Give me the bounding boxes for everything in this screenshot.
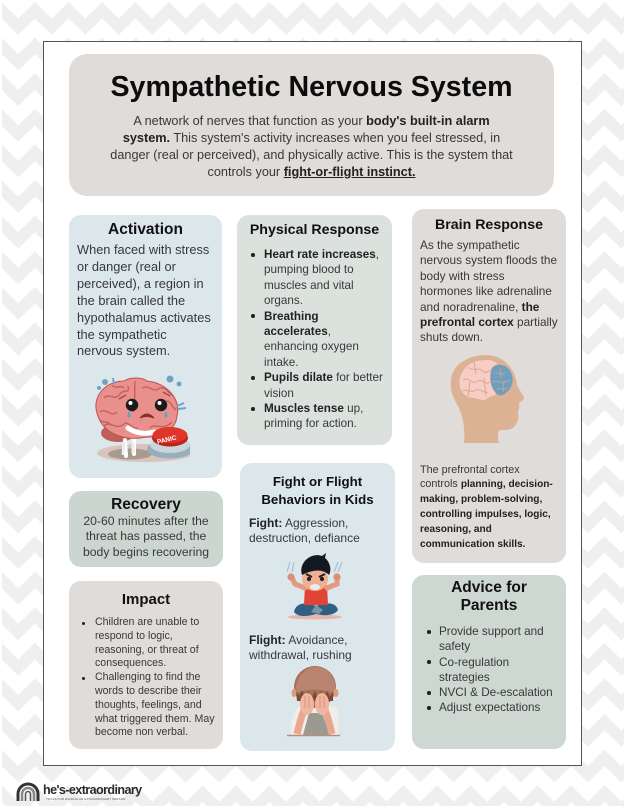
impact bullets: Challenging to find the (95, 671, 200, 683)
heading: fight or flight (261, 474, 374, 506)
title: Sympathetic Nervous System (110, 71, 513, 103)
prefrontal cortex text (420, 464, 553, 550)
icon: rainbow (16, 782, 40, 801)
intro text: system. This system's activity increases when you feel stressed, in (123, 131, 500, 145)
recovery text: threat has passed, the (86, 529, 206, 543)
physical response bullets: Pupils dilate for better (264, 371, 383, 384)
flight text (249, 633, 352, 662)
recovery text: body begins recovering (83, 545, 209, 559)
activation text: or danger (real or (77, 259, 176, 274)
prefrontal cortex text: communication skills. (420, 539, 525, 550)
impact bullets: thoughts, feelings, and (95, 699, 202, 711)
advice bullets: Provide support and (439, 625, 544, 638)
physical response bullets: muscles and vital (264, 279, 354, 292)
impact bullets: what triggered them. May (95, 713, 215, 725)
physical response bullets: organs. (264, 294, 303, 307)
logo tagline: TOOLS FOR RAISING AN EXTRAORDINARY PERSON (46, 797, 125, 801)
activation text: When faced with stress (77, 242, 209, 257)
heading: impact: Impact (122, 591, 170, 608)
activation text: the sympathetic (77, 327, 167, 342)
heading: brain response: Brain Response (435, 217, 543, 233)
panel: physical response (237, 215, 392, 445)
heading: fight or flight: Fight or Flight (273, 474, 362, 489)
flight text: Flight: Avoidance, (249, 633, 347, 647)
panel: fight or flight behaviors (240, 463, 395, 751)
prefrontal cortex text: making, problem-solving, (420, 494, 542, 505)
impact bullets: become non verbal. (95, 726, 188, 738)
physical response bullets: priming for action. (264, 417, 357, 430)
physical response bullets: vision (264, 387, 294, 400)
brain response text: body with stress (420, 269, 505, 283)
physical response bullets: Breathing (264, 310, 319, 323)
impact bullets: words to describe their (95, 685, 202, 697)
advice bullets: Adjust expectations (439, 701, 540, 714)
fight text: destruction, defiance (249, 531, 360, 545)
activation text (77, 242, 211, 358)
advice bullets: safety (439, 640, 470, 653)
advice bullets: strategies (439, 671, 490, 684)
icon: child hiding face (287, 666, 340, 736)
heading: advice for parents: Parents (461, 597, 517, 614)
physical response bullets: pumping blood to (264, 263, 354, 276)
icon: panicking brain pressing button (95, 376, 190, 462)
logo wordmark: he's-extraordinary (43, 783, 142, 797)
intro text: danger (real or perceived), and physically active. This is the system that (110, 148, 513, 162)
activation text: the brain called the (77, 293, 185, 308)
activation text: nervous system. (77, 343, 170, 358)
icon: head silhouette with brain (450, 355, 524, 443)
brain response text: hormones like adrenaline (420, 284, 552, 298)
advice bullets: NVCI & De-escalation (439, 686, 553, 699)
icon: panicking brain pressing button: PANIC (156, 434, 178, 446)
brain response text: prefrontal cortex partially (420, 315, 558, 329)
prefrontal cortex text: The prefrontal cortex (420, 464, 520, 476)
panel: brain response (412, 209, 566, 563)
panel: recovery (69, 491, 223, 567)
recovery text: 20-60 minutes after the (83, 514, 209, 528)
physical response bullets: Heart rate increases, (264, 248, 379, 261)
heading: advice for parents (451, 579, 527, 614)
fight text (249, 516, 360, 545)
physical response bullets: Muscles tense up, (264, 402, 363, 415)
intro text: controls your fight-or-flight instinct. (208, 165, 415, 179)
physical response bullets: accelerates, (264, 325, 331, 338)
panel: activation (69, 215, 222, 478)
physical response bullets (251, 248, 383, 430)
prefrontal cortex text: controls planning, decision- (420, 478, 553, 490)
logo: he's-extraordinary (16, 782, 142, 801)
prefrontal cortex text: controlling impulses, logic, (420, 509, 551, 520)
prefrontal cortex text: reasoning, and (420, 524, 492, 535)
panel: header (69, 54, 554, 196)
intro text (110, 114, 513, 179)
icon: angry child (286, 553, 342, 620)
brain response text: and noradrenaline, the (420, 300, 539, 314)
heading: physical response: Physical Response (250, 222, 379, 238)
physical response bullets: enhancing oxygen (264, 340, 359, 353)
heading: recovery: Recovery (111, 496, 181, 513)
recovery text (83, 514, 209, 559)
impact bullets (82, 616, 215, 738)
impact bullets: Children are unable to (95, 616, 199, 628)
activation text: hypothalamus activates (77, 310, 211, 325)
fight text: Fight: Aggression, (249, 516, 348, 530)
physical response bullets: intake. (264, 356, 298, 369)
heading: fight or flight: Behaviors in Kids (261, 492, 374, 506)
impact bullets: consequences. (95, 657, 166, 669)
brain response text: nervous system floods the (420, 253, 557, 267)
main white sheet (43, 41, 582, 766)
activation text: perceived), a region in (77, 276, 204, 291)
panel: advice for parents (412, 575, 566, 749)
brain response text (420, 238, 558, 344)
flight text: withdrawal, rushing (249, 648, 352, 662)
impact bullets: respond to logic, (95, 630, 173, 642)
brain response text: shuts down. (420, 330, 483, 344)
intro text: A network of nerves that function as your body's built-in alarm (133, 114, 490, 128)
brain response text: As the sympathetic (420, 238, 520, 252)
advice bullets: Co-regulation (439, 656, 509, 669)
impact bullets: reasoning, or threat of (95, 644, 199, 656)
heading: activation: Activation (108, 221, 183, 238)
panel: impact (69, 581, 223, 749)
heading: advice for parents: Advice for (451, 579, 527, 596)
advice bullets (427, 625, 553, 714)
